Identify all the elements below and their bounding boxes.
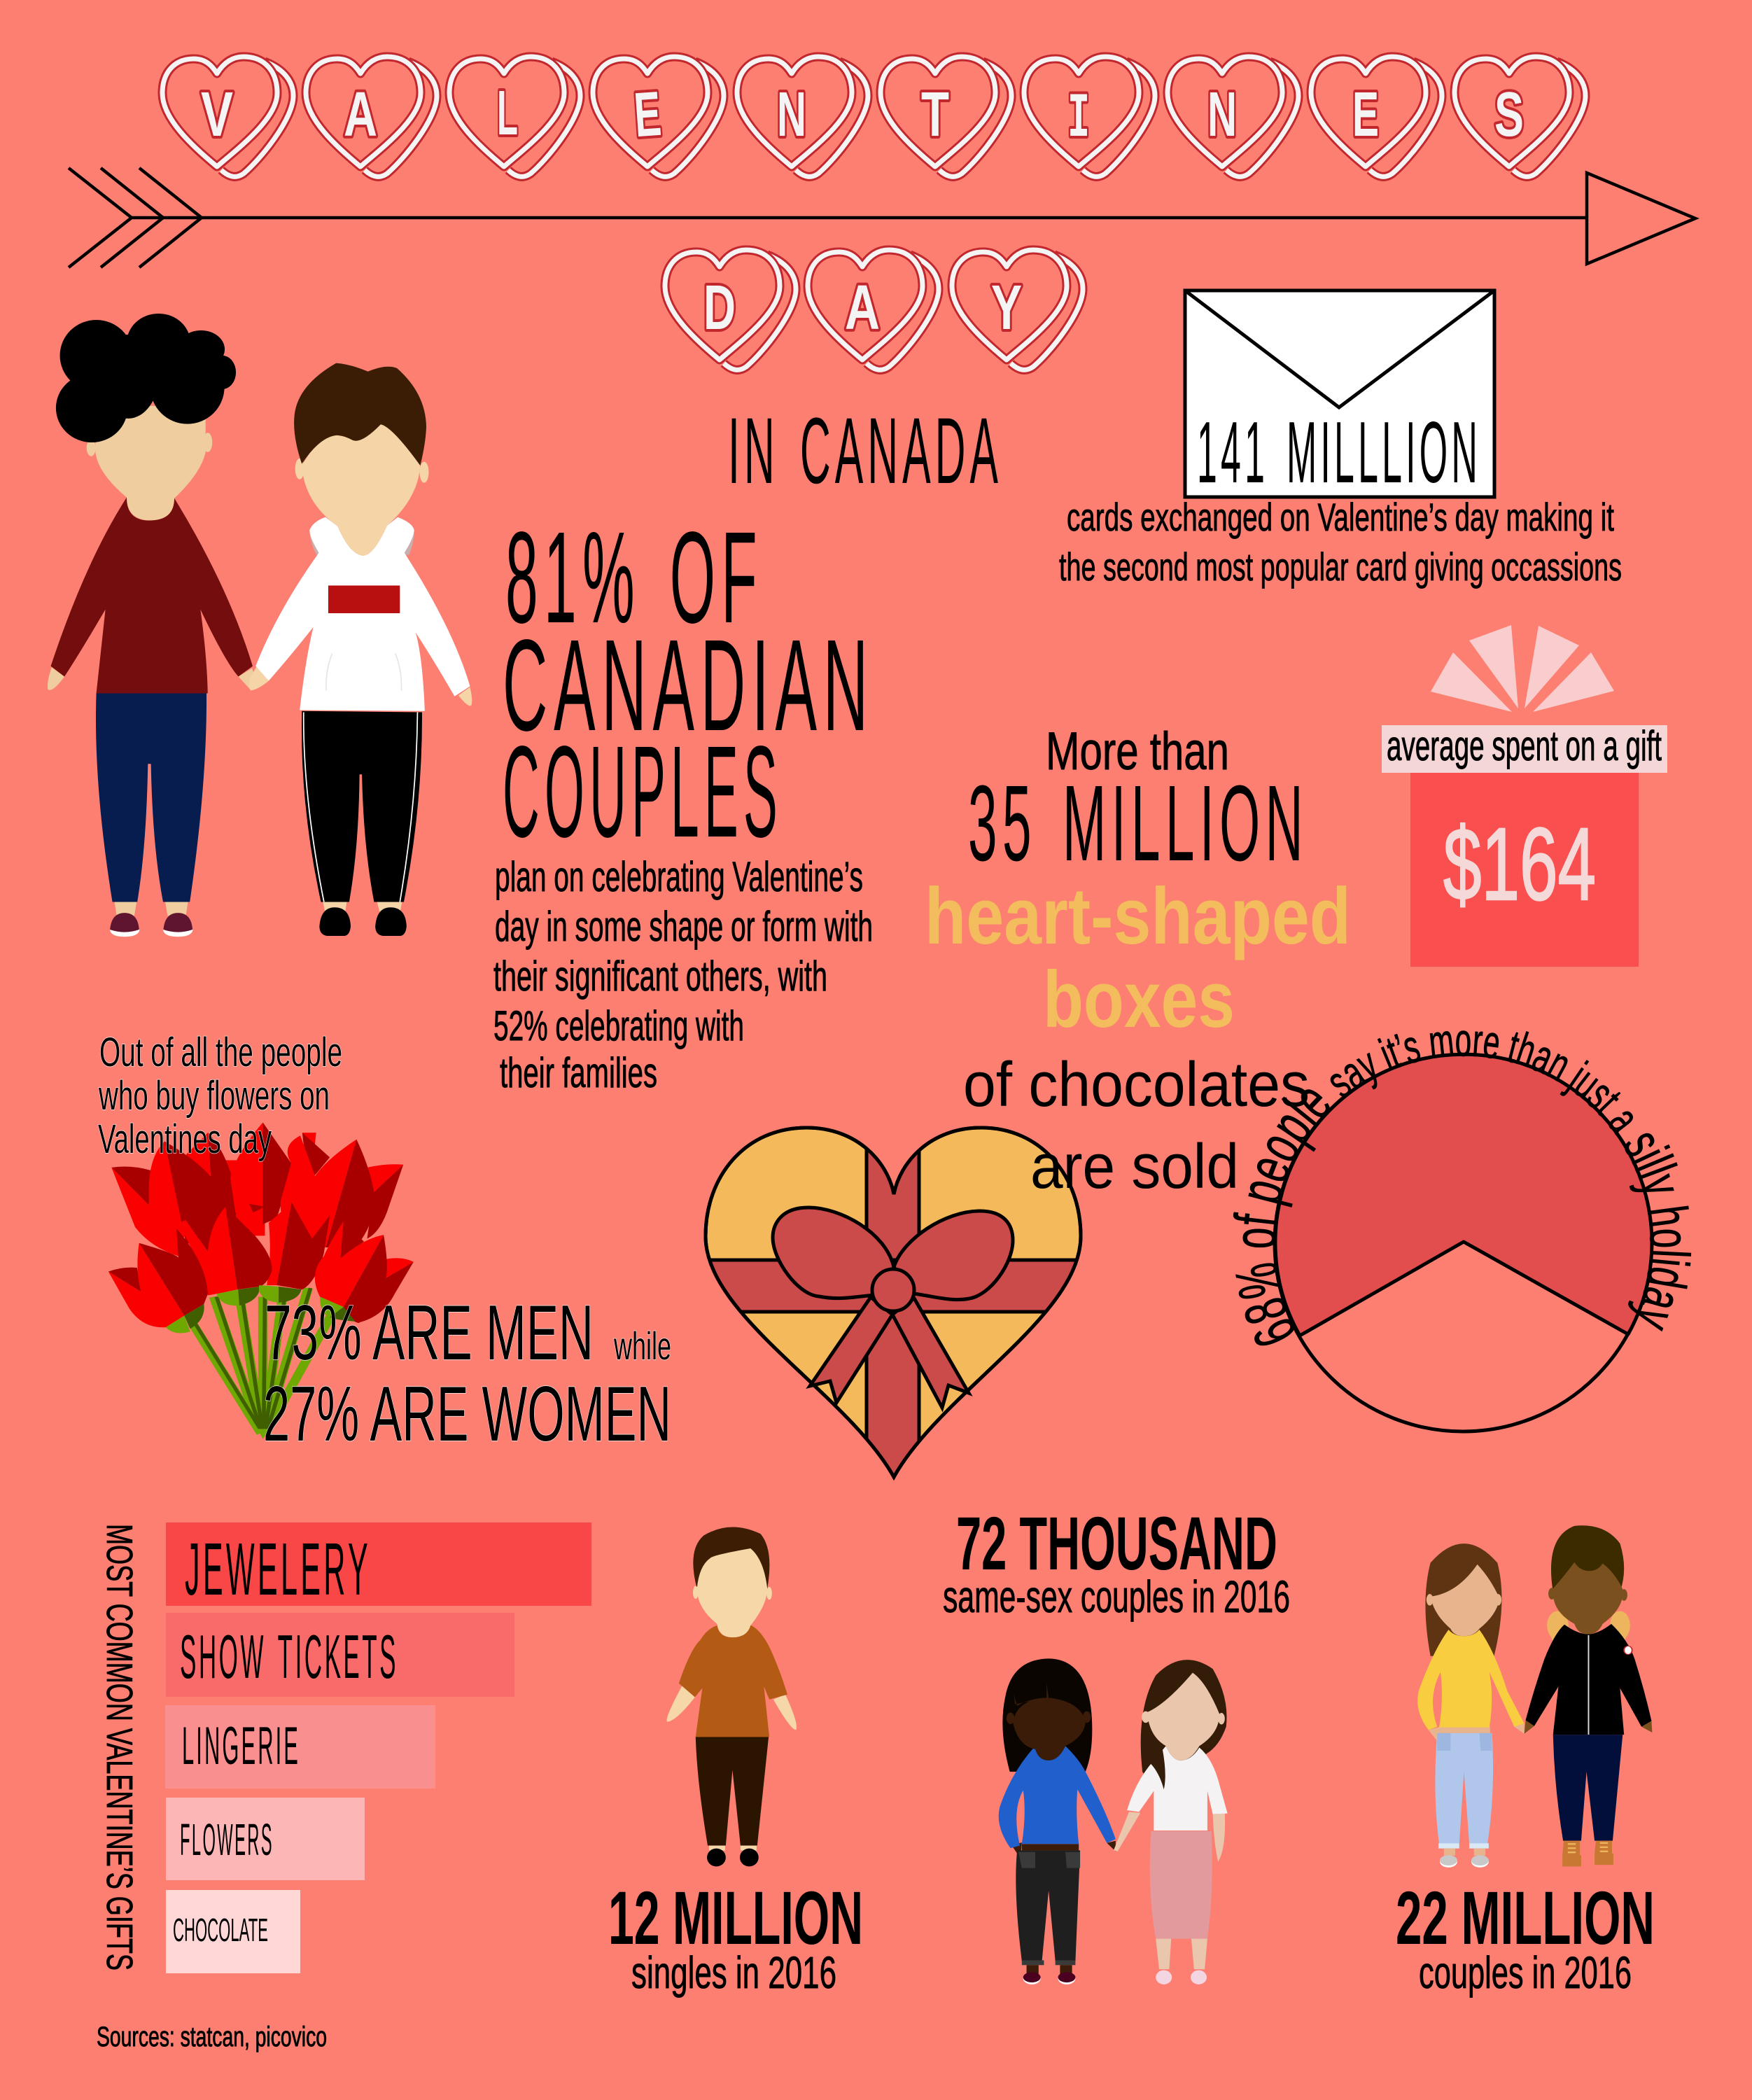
body line 4: 52% celebrating with	[493, 1002, 744, 1049]
pie chart	[1233, 1030, 1691, 1434]
while: while	[613, 1324, 671, 1368]
curved label: 68% of people say it’s more than just a silly holiday	[1233, 1030, 1691, 1345]
sources: Sources: statcan, picovico	[97, 2022, 327, 2052]
heart letter A: A	[845, 273, 880, 343]
text: CANADIAN	[503, 613, 874, 758]
gift box	[1410, 773, 1639, 967]
bar show tickets: SHOW TICKETS	[180, 1622, 398, 1691]
heart letter V	[162, 57, 293, 176]
same-sex caption: same-sex couples in 2016	[943, 1572, 1290, 1622]
gift amount: $164	[1443, 807, 1596, 922]
person left	[48, 314, 256, 937]
title: VALENTINES hearts	[162, 57, 1585, 176]
flowers intro line 1: Out of all the people	[99, 1030, 342, 1075]
woman blue sweater	[999, 1658, 1116, 1984]
bar jewelery: JEWELERY	[185, 1528, 371, 1611]
73% men: 73% ARE MEN	[265, 1289, 594, 1376]
envelope card stat	[1059, 290, 1622, 589]
heart base	[706, 1128, 1081, 1477]
title: DAY hearts	[665, 250, 1083, 370]
27% women: 27% ARE WOMEN	[263, 1371, 671, 1457]
heart letter S	[1455, 57, 1585, 176]
body line 2: day in some shape or form with	[495, 903, 873, 950]
stat: 81% of Canadian couples: 81% OF	[505, 505, 763, 650]
illustrated people row	[667, 1525, 1652, 1984]
heart-shaped: heart-shaped	[925, 872, 1351, 961]
bar show tickets	[166, 1613, 514, 1697]
stat: 22 million	[1396, 1875, 1655, 1998]
72 thousand number: 72 THOUSAND	[956, 1501, 1277, 1586]
bow tails	[810, 1297, 969, 1408]
man black jacket	[1525, 1525, 1652, 1866]
heart letter E	[593, 57, 724, 176]
pie circle	[1275, 1055, 1651, 1432]
pie 68 percent slice	[1275, 1054, 1652, 1336]
stat: 12 million	[608, 1875, 863, 1998]
heart letter L: L	[497, 78, 518, 148]
heart letter L	[449, 57, 580, 176]
heart letter E	[1311, 57, 1442, 176]
stat: 72 thousand	[943, 1501, 1290, 1622]
heart letter V: V	[201, 80, 233, 150]
gift lid	[1382, 725, 1667, 773]
gift: average spent	[1382, 625, 1667, 967]
couples caption: couples in 2016	[1419, 1947, 1632, 1998]
envelope	[1185, 290, 1494, 497]
bar chart: gifts	[99, 1522, 591, 1973]
heart letter N: N	[777, 80, 806, 150]
bar chocolate	[166, 1890, 300, 1973]
bar lingerie: LINGERIE	[182, 1716, 300, 1776]
arrow	[69, 168, 1695, 267]
heart letter Y: Y	[991, 273, 1022, 343]
stat: 81% of Canadian couples	[493, 505, 874, 1096]
gift bow rays	[1431, 625, 1614, 712]
heart letter D: D	[703, 273, 736, 343]
bar flowers	[166, 1798, 365, 1880]
text: IN CANADA	[728, 399, 1002, 503]
couple illustration	[48, 314, 472, 937]
ribbons	[711, 1149, 1075, 1474]
of chocolates: of chocolates	[963, 1050, 1310, 1120]
12 million number: 12 MILLION	[608, 1875, 863, 1960]
person right	[249, 363, 472, 936]
stat: 35 million heart-shaped boxes	[925, 722, 1351, 1202]
heart letter T: T	[921, 80, 949, 150]
heart letter N: N	[1207, 80, 1237, 150]
flowers stat	[98, 1030, 671, 1457]
stat: 81% of Canadian couples: COUPLES	[503, 720, 783, 864]
boxes: boxes	[1043, 955, 1235, 1044]
heart letter E: E	[1352, 80, 1379, 150]
body line 1: plan on celebrating Valentine’s	[495, 853, 863, 900]
heart letter T	[881, 57, 1011, 176]
flowers intro line 2: who buy flowers on	[98, 1073, 330, 1119]
heart letter D	[665, 250, 796, 370]
chocolate heart box	[700, 1120, 1092, 1484]
heart letter N	[1168, 57, 1298, 176]
are sold: are sold	[1030, 1132, 1239, 1202]
tulip bouquet	[108, 1123, 414, 1439]
heart letter A: A	[344, 80, 377, 150]
body line 5: their families	[500, 1049, 657, 1096]
bar flowers: FLOWERS	[180, 1814, 274, 1865]
stat: 35 million heart-shaped boxes: 35 MILLION	[968, 763, 1308, 883]
single man	[667, 1527, 797, 1866]
heart letter Y	[952, 250, 1083, 370]
heart letter E: E	[632, 79, 664, 150]
bar chocolate: CHOCOLATE	[173, 1912, 268, 1948]
bar lingerie	[165, 1705, 435, 1788]
woman white top	[1114, 1660, 1228, 1984]
body line 3: their significant others, with	[493, 953, 827, 1000]
heart letter N	[737, 57, 868, 176]
flowers intro line 3: Valentines day	[98, 1116, 272, 1162]
heart letter A	[306, 57, 437, 176]
heart letter I: I	[1067, 84, 1090, 155]
bow loops	[773, 1208, 1013, 1300]
heart letter I	[1024, 57, 1155, 176]
bow knot	[872, 1269, 914, 1311]
heart outline	[706, 1128, 1081, 1477]
more than: More than	[1046, 722, 1229, 781]
heart letter S: S	[1494, 80, 1524, 150]
heart letter A	[808, 250, 939, 370]
singles caption: singles in 2016	[631, 1947, 836, 1998]
woman yellow sweater	[1417, 1544, 1525, 1868]
